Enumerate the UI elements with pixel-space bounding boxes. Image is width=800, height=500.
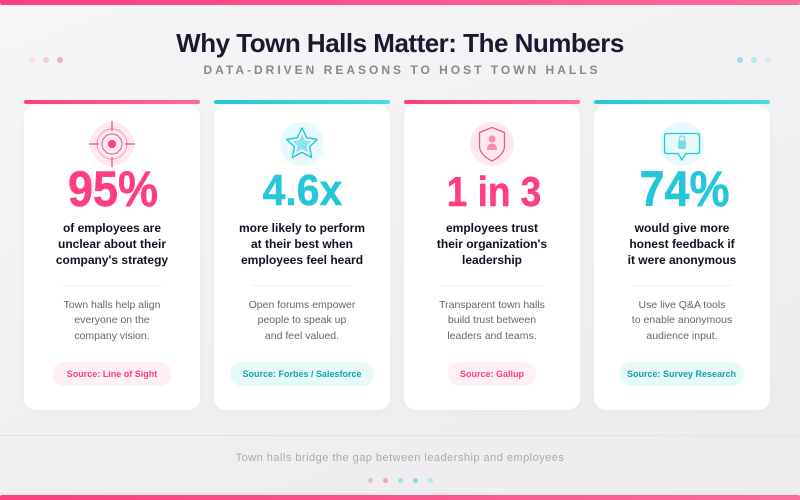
icon: target xyxy=(89,121,135,167)
statistic: 4.6x xyxy=(263,166,342,215)
supporting text: Use live Q&A tools xyxy=(639,298,725,310)
source pill xyxy=(230,362,374,386)
source pill: Source: Forbes / Salesforce xyxy=(242,369,362,379)
supporting text: Open forums empower xyxy=(249,298,355,310)
panel: card 1 xyxy=(24,105,200,410)
supporting text: and feel valued. xyxy=(265,330,339,342)
top accent bar xyxy=(0,0,800,5)
source pill xyxy=(448,362,536,386)
icon: anonymous speech bubble with lock xyxy=(660,122,704,166)
supporting text: Town halls help align xyxy=(64,298,160,310)
stat description: it were anonymous xyxy=(628,253,736,267)
supporting text: company vision. xyxy=(74,330,150,342)
stat description xyxy=(56,221,168,267)
decorative dots: right xyxy=(737,57,771,63)
stat description: employees trust xyxy=(446,221,538,235)
card 1 accent bar xyxy=(24,100,200,104)
subtitle: DATA-DRIVEN REASONS TO HOST TOWN HALLS xyxy=(203,63,601,77)
statistic: 95% xyxy=(68,161,158,217)
stat description xyxy=(239,221,365,267)
icon: shield xyxy=(470,122,514,166)
supporting text: people to speak up xyxy=(258,314,346,326)
supporting text: audience input. xyxy=(646,330,718,342)
card 4 accent bar xyxy=(594,100,770,104)
supporting text xyxy=(249,298,356,342)
panel: card 3 xyxy=(404,105,580,410)
stat description: their organization's xyxy=(437,237,547,251)
bottom accent bar xyxy=(0,495,800,500)
supporting text: Transparent town halls xyxy=(439,298,545,310)
stat description xyxy=(437,221,547,267)
stat description: of employees are xyxy=(63,221,161,235)
statistic: 1 in 3 xyxy=(447,168,541,214)
source pill xyxy=(52,362,172,386)
stat description: employees feel heard xyxy=(241,253,363,267)
source pill: Source: Survey Research xyxy=(627,369,736,379)
supporting text: everyone on the xyxy=(74,314,150,326)
source pill: Source: Line of Sight xyxy=(67,369,157,379)
supporting text: to enable anonymous xyxy=(632,314,732,326)
stat description: unclear about their xyxy=(58,237,166,251)
stat description: leadership xyxy=(462,253,522,267)
card 3 accent bar xyxy=(404,100,580,104)
supporting text: leaders and teams. xyxy=(447,330,537,342)
supporting text xyxy=(439,298,545,342)
card 2 accent bar xyxy=(214,100,390,104)
statistic: 74% xyxy=(639,161,730,217)
stat description xyxy=(628,221,736,267)
footer dots xyxy=(368,478,433,483)
supporting text: build trust between xyxy=(448,314,536,326)
title: Why Town Halls Matter: The Numbers xyxy=(176,28,624,58)
panel: card 4 xyxy=(594,105,770,410)
stat description: more likely to perform xyxy=(239,221,365,235)
source pill xyxy=(619,362,744,386)
decorative dots: left xyxy=(29,57,63,63)
supporting text xyxy=(632,298,732,342)
panel: card 2 xyxy=(214,105,390,410)
supporting text xyxy=(64,298,160,342)
footer text: Town halls bridge the gap between leadership and employees xyxy=(236,452,564,464)
stat description: company's strategy xyxy=(56,253,168,267)
source pill: Source: Gallup xyxy=(460,369,524,379)
stat description: honest feedback if xyxy=(629,237,735,251)
stat description: would give more xyxy=(635,221,729,235)
icon: star xyxy=(280,122,324,166)
footer strip xyxy=(0,435,800,495)
stat description: at their best when xyxy=(251,237,353,251)
